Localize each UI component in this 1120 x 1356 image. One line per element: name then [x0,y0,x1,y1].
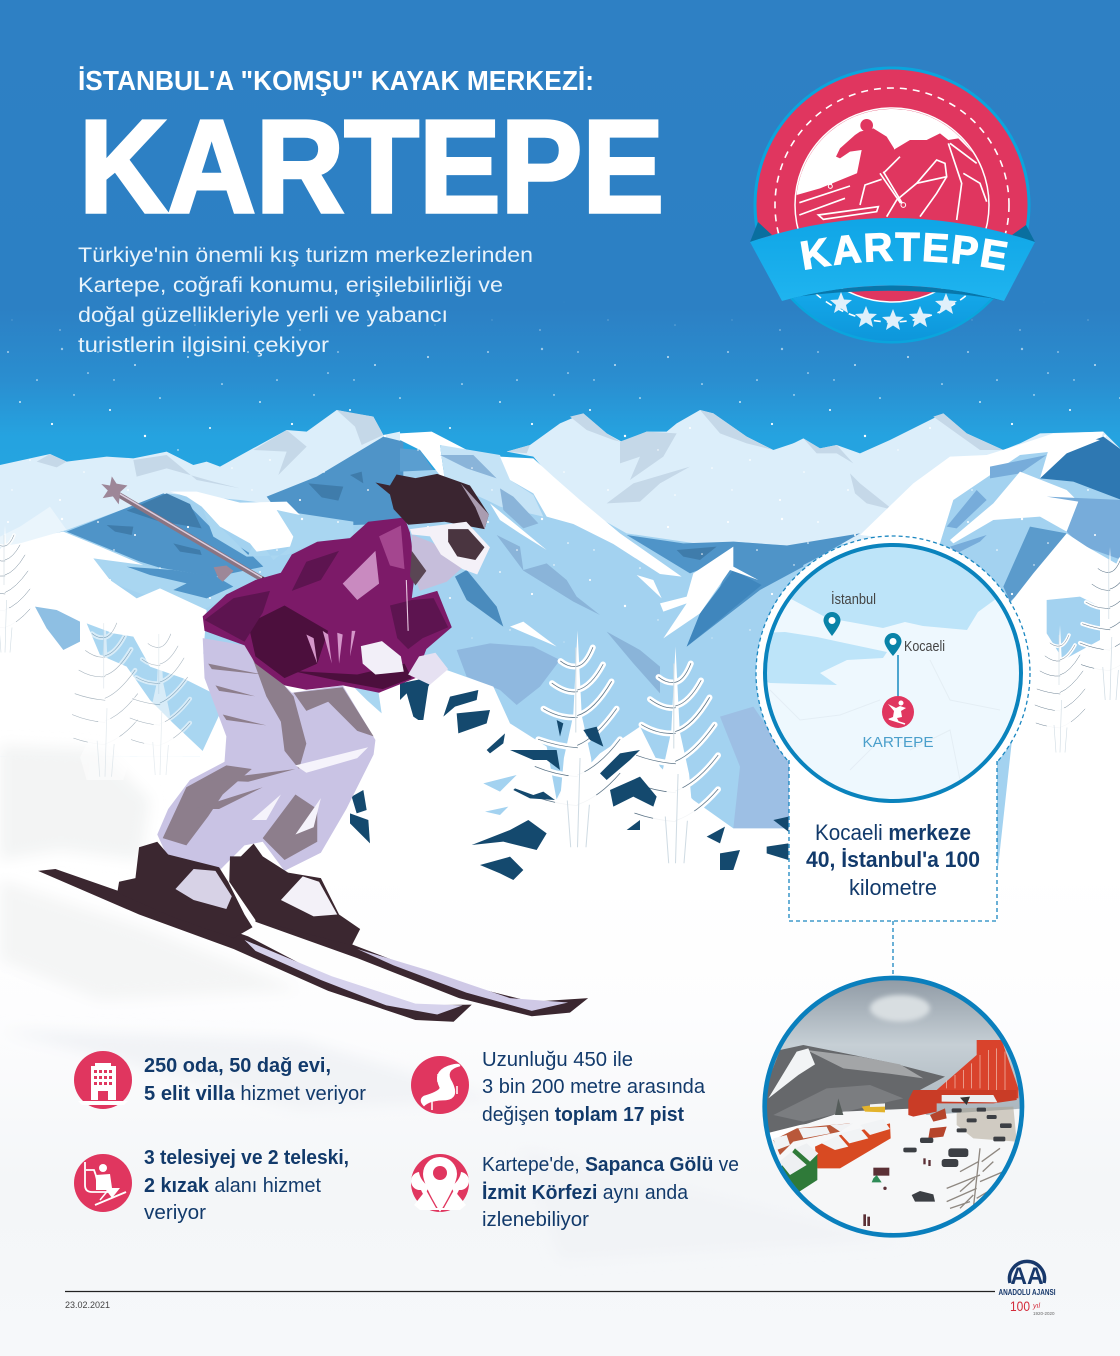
callout text [806,820,980,900]
badge: mountain and skier silhouette [797,107,993,220]
logo: Anadolu Ajansı: ANADOLU AJANSI [998,1287,1056,1297]
logo: Anadolu Ajansı [998,1261,1056,1316]
dashed connector [892,921,894,978]
text: değişen toplam 17 pist [482,1103,684,1126]
badge: ribbon [750,218,1035,301]
text: 3 telesiyej ve 2 teleski, [144,1146,349,1169]
background: mountain range [0,410,1120,880]
text: veriyor [144,1201,206,1224]
badge: five stars [830,292,957,330]
text: 250 oda, 50 dağ evi, [144,1054,331,1077]
jacket [203,517,452,693]
badge: ribbon word: KARTEPE [800,232,1008,270]
background: snow-covered trees [0,525,1120,900]
text [144,1054,366,1105]
connector line [897,655,899,698]
map of Istanbul and Kocaeli [760,540,1030,801]
callout text: 40, İstanbul'a 100 [806,847,980,872]
intro paragraph: turistlerin ilgisini çekiyor [78,334,329,357]
badge: ribbon fold [750,222,1035,242]
photo: Kartepe resort [760,975,1027,1242]
stat: hotel rooms [74,1051,366,1109]
background: dark tree gaps [350,677,870,880]
callout text: kilometre [849,875,937,900]
near ski [38,869,472,1022]
logo: Anadolu Ajansı: 1920-2020 [1033,1311,1055,1316]
callout box [756,536,1030,921]
stat: views [411,1153,739,1231]
text: Kartepe'de, Sapanca Gölü ve [482,1153,739,1176]
icon: location pins [411,1154,469,1212]
far ski [255,911,588,1016]
text [482,1048,706,1126]
title: KARTEPE: KARTEPE [79,93,664,240]
map callout [756,536,1030,921]
head and goggles [375,474,490,591]
text: 2 kızak alanı hizmet [144,1174,321,1197]
title: kicker: İSTANBUL'A "KOMŞU" KAYAK MERKEZİ: [78,65,594,96]
text [482,1153,739,1231]
logo: Anadolu Ajansı: yıl [1032,1303,1040,1310]
pin: Istanbul [824,590,876,636]
text [144,1146,349,1224]
intro paragraph: Türkiye'nin önemli kış turizm merkezlerinden [78,244,533,267]
date: 23.02.2021 [65,1300,110,1310]
foreground: snow slope [0,745,1120,1356]
icon: chairlift [74,1154,132,1212]
pants [157,638,375,871]
ski pole [101,476,283,595]
stat: ski lifts [74,1146,349,1224]
intro paragraph: doğal güzellikleriyle yerli ve yabancı [78,304,448,327]
pin: Kocaeli [884,633,945,656]
center section of the range [400,410,803,828]
label: Kartepe: KARTEPE [862,734,934,751]
icon: hotel [74,1051,132,1109]
text: İzmit Körfezi aynı anda [482,1181,689,1204]
right section of the range [780,413,1120,880]
text: izlenebiliyor [482,1208,589,1231]
text: 5 elit villa hizmet veriyor [144,1082,366,1105]
white tree mass [400,670,790,900]
gloves [361,641,448,685]
pin: Istanbul: İstanbul [831,590,876,608]
ski boots [117,842,360,945]
logo: Anadolu Ajansı: AA [1010,1263,1044,1290]
stat: slopes [411,1048,706,1126]
pin: Kocaeli: Kocaeli [904,638,945,655]
icon: ski run [411,1056,469,1114]
intro paragraph: Kartepe, coğrafi konumu, erişilebilirliği ve [78,274,503,297]
skier illustration [38,474,588,1022]
badge: ribbon shadow [782,286,1004,301]
footer rule [65,1290,995,1292]
logo: Anadolu Ajansı: 100 [1010,1298,1030,1314]
left section of the range [0,410,403,867]
intro paragraph [78,244,533,357]
text: 3 bin 200 metre arasında [482,1075,706,1098]
callout text: Kocaeli merkeze [815,820,971,845]
background: sky [0,0,1120,560]
text: Uzunluğu 450 ile [482,1048,633,1071]
badge: Kartepe emblem [750,66,1035,344]
marker: Kartepe [882,696,914,728]
background: snowfall [7,319,1120,643]
